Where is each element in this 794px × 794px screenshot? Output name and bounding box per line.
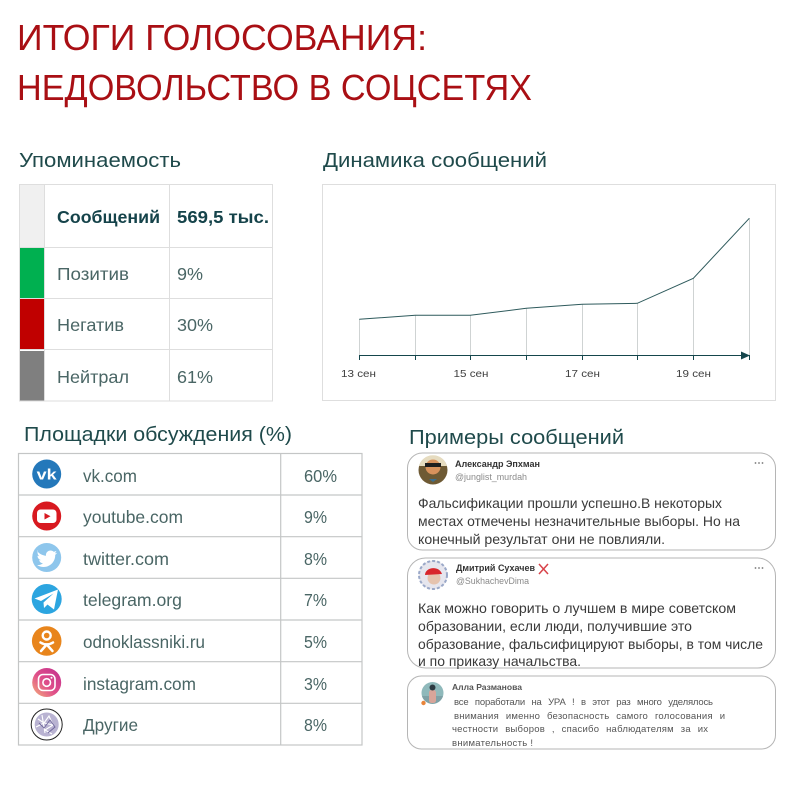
panel: platforms table: odnoklassniki.ru	[83, 632, 205, 652]
title: ИТОГИ ГОЛОСОВАНИЯ:	[17, 17, 427, 58]
icon: red cross	[539, 564, 548, 574]
card: message 3: честности выборов , спасибо наблюдателям за их	[452, 724, 708, 735]
icon: twitter	[32, 543, 61, 572]
avatar: Alla Razmanova	[421, 682, 444, 705]
heading: mentions: Упоминаемость	[19, 149, 181, 172]
icon: odnoklassniki	[32, 626, 62, 656]
panel: platforms table: vk.com	[83, 466, 137, 486]
panel: platforms table: 60%	[304, 466, 337, 486]
panel: mentions table	[20, 184, 272, 401]
panel: mentions table: 9%	[177, 264, 203, 284]
card: message 1: конечный результат они не повлияли.	[418, 531, 665, 547]
panel: platforms table: 8%	[304, 549, 327, 569]
line chart: message dynamics: 19 сен	[676, 368, 711, 380]
card: message 2: Как можно говорить о лучшем в мире советском	[418, 600, 736, 616]
icon: telegram	[32, 584, 62, 614]
panel: mentions table: Нейтрал	[57, 367, 129, 387]
heading: discussion platforms: Площадки обсуждения (%)	[24, 423, 292, 446]
line chart: message dynamics	[322, 184, 776, 400]
panel: platforms table: Другие	[83, 715, 138, 735]
card: message 3: Алла Разманова	[452, 682, 522, 692]
panel: mentions table: 569,5 тыс.	[177, 207, 269, 227]
panel: platforms table: youtube.com	[83, 507, 183, 527]
card: message 1: @junglist_murdah	[455, 472, 527, 482]
panel: platforms table	[18, 454, 362, 745]
heading: message dynamics: Динамика сообщений	[323, 149, 547, 172]
icon: youtube	[32, 502, 61, 530]
card: message 3: внимания именно безопасность самого голосования и	[454, 711, 725, 722]
line chart: message dynamics: 13 сен	[341, 368, 376, 380]
icon: more menu	[755, 462, 763, 464]
panel: platforms table: instagram.com	[83, 674, 196, 694]
panel: platforms table: 3%	[304, 674, 327, 694]
panel: platforms table: twitter.com	[83, 549, 169, 569]
panel: mentions table: Сообщений	[57, 207, 160, 227]
panel: platforms table: 8%	[304, 715, 327, 735]
card: message 2: и по приказу начальства.	[418, 653, 581, 669]
panel: platforms table: 9%	[304, 507, 327, 527]
icon: more menu	[755, 567, 763, 569]
line chart: message dynamics: 15 сен	[454, 368, 489, 380]
card: message 2: Дмитрий Сухачев	[456, 563, 535, 573]
title	[17, 17, 532, 108]
card: message 1: Фальсификации прошли успешно.В некоторых	[418, 495, 722, 511]
panel: mentions table: Позитив	[57, 264, 129, 284]
icon: vk	[32, 460, 61, 488]
panel: platforms table: 7%	[304, 590, 327, 610]
card: message 1: Александр Эпхман	[455, 459, 540, 469]
avatar: Dmitry Sukhachev	[418, 560, 448, 590]
panel: mentions table: 30%	[177, 315, 213, 335]
card: message 3: все поработали на УРА ! в этот раз много уделялось	[454, 697, 713, 708]
card: message 2	[408, 558, 776, 669]
card: message 3	[408, 676, 776, 749]
icon: other platforms	[31, 709, 62, 740]
icon: vk: vk	[37, 466, 57, 484]
card: message 1	[408, 453, 776, 550]
panel: mentions table: Негатив	[57, 315, 124, 335]
card: message 2: образование, фальсифицируют выборы, в том числе	[418, 636, 763, 652]
card: message 3: внимательность !	[452, 738, 533, 749]
icon: instagram	[32, 668, 61, 697]
card: message 2: @SukhachevDima	[456, 576, 529, 586]
panel: mentions table: 61%	[177, 367, 213, 387]
card: message 2: образовании, если люди, получившие это	[418, 618, 692, 634]
title: НЕДОВОЛЬСТВО В СОЦСЕТЯХ	[17, 67, 532, 108]
heading: message examples: Примеры сообщений	[409, 426, 624, 449]
card: message 1: местах отмечены незначительные выборы. Но на	[418, 513, 740, 529]
avatar: Alexander Epkhman	[418, 455, 448, 484]
panel: platforms table: telegram.org	[83, 590, 182, 610]
line chart: message dynamics: 17 сен	[565, 368, 600, 380]
panel: platforms table: 5%	[304, 632, 327, 652]
